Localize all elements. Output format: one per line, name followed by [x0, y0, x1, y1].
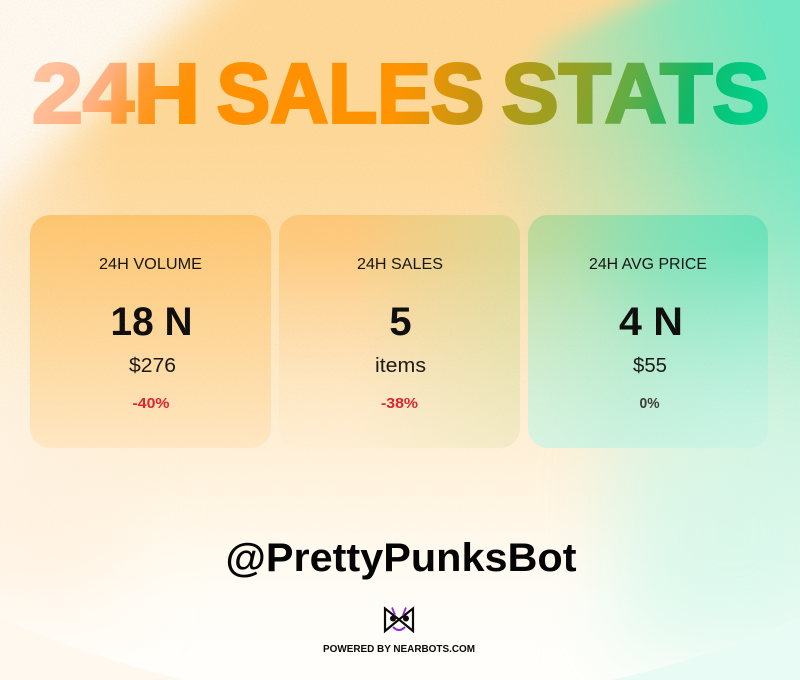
change: -40% [132, 395, 170, 412]
bot handle: @PrettyPunksBot [226, 536, 576, 580]
change: 0% [640, 395, 660, 412]
title: STATS [501, 46, 770, 140]
icon: nearbots logo [385, 608, 413, 631]
title: 24H [32, 46, 200, 141]
label: 24h avg price: 24H AVG PRICE [589, 256, 707, 273]
label: 24h sales: 24H SALES [357, 256, 443, 273]
usd value: $276 [129, 355, 176, 377]
unit: items: items [375, 355, 426, 377]
title: SALES [217, 48, 484, 141]
usd value: $55 [633, 355, 667, 377]
footer: powered by: POWERED BY NEARBOTS.COM [323, 643, 475, 655]
panel: 24h sales [279, 215, 520, 448]
title [32, 46, 770, 141]
panel: 24h avg price [528, 215, 768, 448]
value: 4 N: 4 N [619, 300, 683, 344]
panel: 24h volume [30, 215, 271, 448]
value: 5: 5 [389, 300, 412, 344]
value: 18 N: 18 N [110, 300, 192, 344]
label: 24h volume: 24H VOLUME [99, 256, 202, 273]
change: -38% [381, 395, 418, 412]
